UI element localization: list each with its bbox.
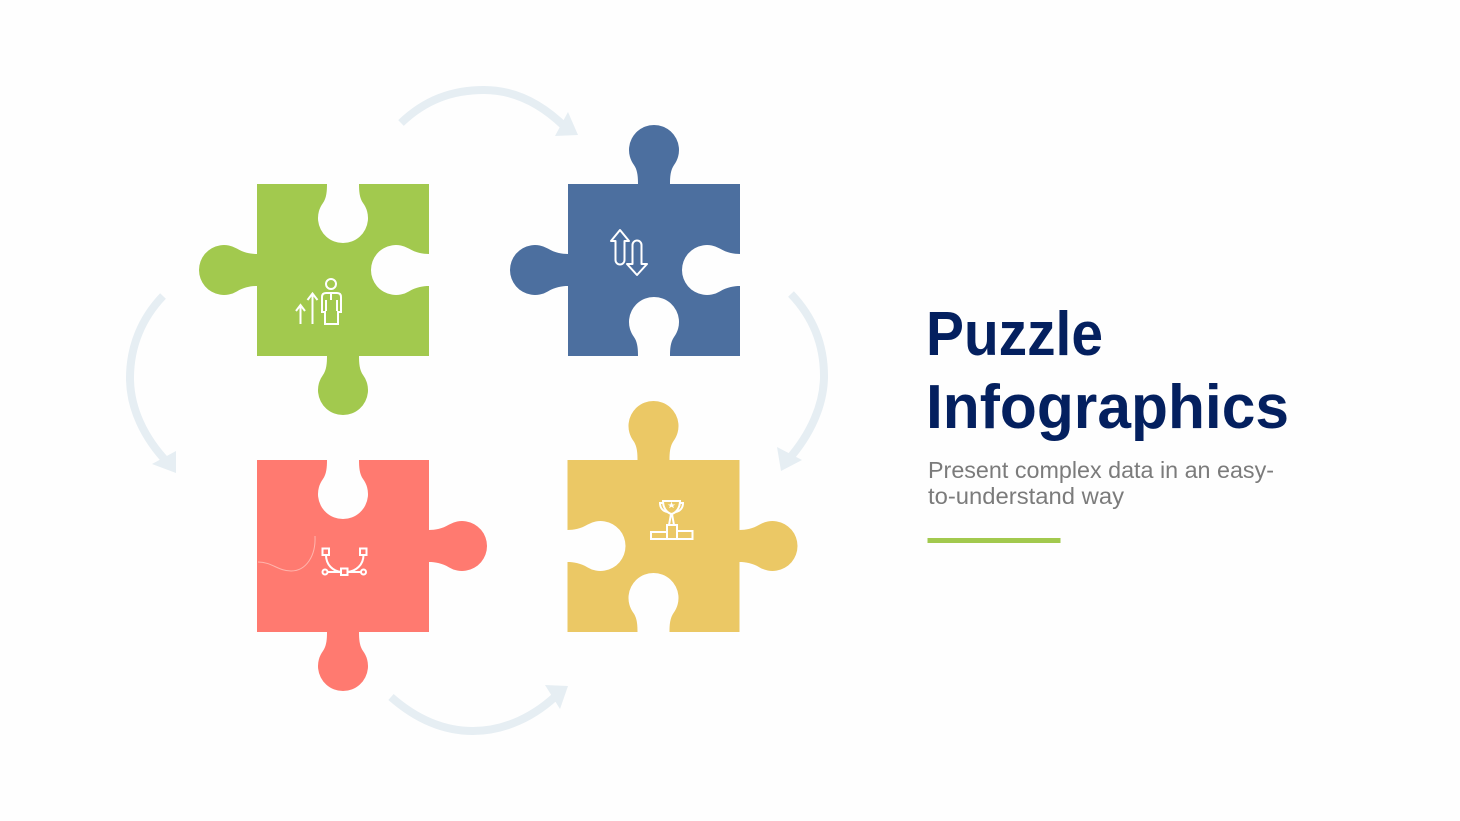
puzzle piece: green [199, 184, 429, 415]
icon: up and down arrows [611, 230, 647, 275]
accent underline [928, 538, 1060, 543]
icon: bezier curve tool [322, 548, 366, 575]
subtitle line 2: to-understand way [928, 483, 1125, 509]
title: Puzzle [926, 300, 1103, 369]
arrow: right, blue to yellow [777, 294, 824, 471]
puzzle piece: red [257, 460, 487, 691]
icon: person with rising arrows [296, 279, 341, 324]
arrow: bottom, red to yellow [391, 685, 568, 731]
subtitle line 1: Present complex data in an easy- [928, 457, 1274, 483]
arrow: left, green to red [130, 296, 176, 473]
puzzle piece: blue [510, 125, 740, 356]
title second line: Infographics [926, 373, 1289, 442]
puzzle piece: yellow [568, 401, 798, 632]
icon: trophy on podium [651, 501, 692, 539]
arrow: top, green to blue [401, 90, 578, 136]
thin curve on red piece [258, 536, 315, 571]
